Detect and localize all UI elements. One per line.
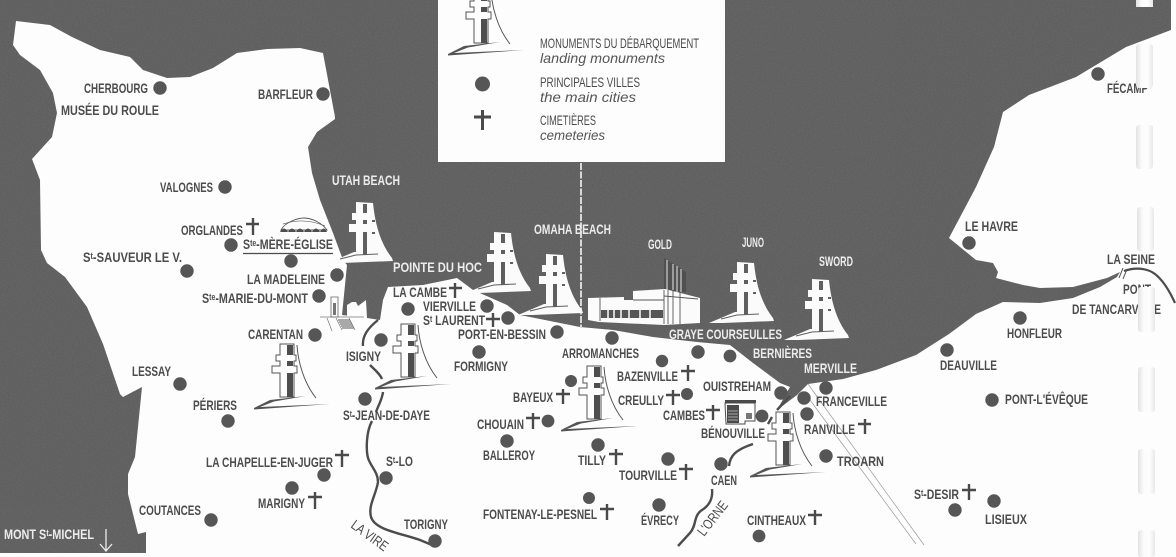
city: Ranville: RANVILLE [804, 421, 855, 437]
monument: Pointe du Hoc [466, 232, 531, 293]
city: Le Havre: LE HAVRE [965, 218, 1018, 234]
city: Carentan: CARENTAN [248, 326, 303, 342]
city: Saint-Lô: -LO [395, 453, 413, 469]
label: Mont Saint-Michel: t [46, 528, 49, 538]
label: Utah Beach: UTAH BEACH [332, 172, 400, 188]
city: Fontenay-le-Pesnel: FONTENAY-LE-PESNEL [483, 506, 597, 522]
city: Évrecy [641, 498, 679, 528]
binding holes strip [1136, 0, 1155, 557]
city: Saint-Lô [379, 453, 413, 485]
city: Saint-Désir [914, 484, 976, 517]
cemetery: Orglandes: ORGLANDES [181, 222, 243, 238]
city: Fécamp: FÉCAMP [1107, 80, 1148, 96]
city: Vierville: VIERVILLE [423, 298, 476, 314]
city: Caen: CAEN [711, 472, 737, 488]
city: Saint-Jean-de-Daye: -JEAN-DE-DAYE [352, 407, 430, 423]
city: Sainte-Marie-du-Mont: S [202, 290, 211, 306]
city: La Madeleine: LA MADELEINE [247, 271, 325, 287]
icon: Gold beach building [588, 258, 700, 325]
city: Balleroy: BALLEROY [483, 447, 535, 463]
monument: Isigny [375, 324, 451, 390]
city: Caen [711, 457, 737, 488]
city: Saint-Jean-de-Daye [343, 392, 430, 423]
city: Saint-Jean-de-Daye: t [350, 409, 352, 419]
city: Cintheaux [747, 510, 822, 542]
city: Le Havre [962, 218, 1018, 250]
city: Marigny: MARIGNY [258, 495, 305, 511]
cemetery: Cambes: CAMBES [663, 407, 705, 423]
city: Formigny: FORMIGNY [454, 358, 508, 374]
city: Creully [618, 388, 693, 408]
city: Troarn [819, 449, 884, 469]
city: Saint-Laurent: t [430, 314, 432, 324]
city: Saint-Laurent [423, 311, 515, 328]
city: Saint-Sauveur le V.: S [83, 249, 92, 265]
river: La Vire [363, 320, 432, 545]
city: Lessay: LESSAY [132, 363, 171, 379]
city: Bayeux [513, 375, 577, 405]
city: Ouistreham: OUISTREHAM [703, 378, 771, 394]
city: Coutances [139, 502, 218, 527]
monument: Carentan [254, 344, 330, 410]
city: Saint-Sauveur le V. [83, 249, 194, 278]
city: Lisieux: LISIEUX [985, 511, 1028, 527]
city: Tilly [578, 438, 623, 468]
city: Lessay [132, 363, 187, 391]
label: Mont Saint-Michel: MONT S [4, 526, 58, 542]
city: Formigny [454, 345, 508, 374]
city: Saint-Sauveur le V.: -SAUVEUR LE V. [93, 249, 182, 265]
underline: Sainte-Mère-Église [243, 252, 333, 254]
city: Torigny: TORIGNY [404, 516, 448, 532]
label: Gold: GOLD [648, 236, 672, 252]
river: L'Orne [678, 396, 790, 546]
city: Sainte-Mère-Église: te [250, 238, 256, 248]
arrow: towards Mont Saint-Michel [100, 529, 112, 551]
city: Isigny [346, 333, 388, 364]
city: Saint-Lô: t [393, 455, 395, 465]
legend text: cimetières: CIMETIÈRES [540, 112, 596, 128]
city: Isigny: ISIGNY [346, 348, 381, 364]
icon: Utah Beach landing stairs [320, 297, 367, 331]
city: Sainte-Mère-Église: S [243, 236, 252, 252]
city: Lisieux [985, 494, 1028, 527]
legend text: landing monuments: landing monuments [540, 50, 665, 66]
city: Barfleur: BARFLEUR [258, 86, 313, 102]
city: Saint-Laurent: LAURENT [432, 312, 485, 328]
city: Évrecy: ÉVRECY [641, 512, 679, 528]
city: Courseulles [724, 350, 736, 362]
city: Bazenville: BAZENVILLE [617, 368, 678, 384]
city: Périers: PÉRIERS [193, 397, 237, 413]
city: Fécamp [1091, 67, 1148, 96]
city: Saint-Désir: S [914, 486, 923, 502]
dot near Sainte-Mère-Église [284, 254, 298, 268]
city: Graye [691, 345, 705, 359]
icon: Sainte-Mère-Église dome [280, 218, 327, 232]
label: Pont: PONT [1123, 281, 1151, 297]
city: Ranville [800, 407, 871, 437]
city: La Cambe [393, 283, 462, 316]
city: Coutances: COUTANCES [139, 502, 201, 518]
city: Honfleur: HONFLEUR [1007, 325, 1062, 341]
city: Sainte-Marie-du-Mont: te [209, 292, 215, 302]
legend text: villes: PRINCIPALES VILLES [540, 74, 640, 90]
label: Graye Courseulles: GRAYE COURSEULLES [669, 326, 782, 342]
city: Cintheaux: CINTHEAUX [747, 512, 806, 528]
city: La Chapelle-en-Juger: LA CHAPELLE-EN-JUGER [206, 454, 333, 470]
monument: Sword [784, 279, 849, 340]
icon: Bénouville Pegasus bridge building [725, 400, 756, 424]
legend cross [474, 110, 491, 130]
city: Fontenay-le-Pesnel [483, 492, 614, 522]
city: Pont-l'Évêque: PONT-L'ÉVÊQUE [1005, 390, 1088, 407]
city: Franceville [797, 391, 887, 409]
legend panel [438, 0, 725, 162]
city: Honfleur [1007, 311, 1062, 341]
city: Deauville [940, 343, 997, 373]
city: Sainte-Mère-Église [224, 236, 333, 252]
city: Bayeux: BAYEUX [513, 389, 553, 405]
label: Musée du Roule: MUSÉE DU ROULE [61, 102, 159, 118]
legend text: main cities: the main cities [540, 89, 636, 105]
city: Cherbourg: CHERBOURG [84, 80, 148, 96]
city: Ouistreham [703, 378, 788, 400]
city: Tourville [619, 452, 693, 483]
label: Juno: JUNO [742, 234, 764, 250]
city: Arromanches: ARROMANCHES [562, 345, 639, 361]
city: Saint-Jean-de-Daye: S [343, 407, 352, 423]
legend text: cemeteries: cemeteries [540, 127, 605, 143]
dotted meridian line [580, 163, 582, 328]
city: Périers [193, 397, 237, 428]
label: La Seine: LA SEINE [1107, 251, 1155, 267]
monument: Juno [709, 262, 774, 323]
monument: Ranville [750, 412, 826, 478]
city: La Chapelle-en-Juger [206, 450, 349, 482]
label: Bernières: BERNIÈRES [753, 345, 812, 361]
label: Sword: SWORD [819, 253, 853, 269]
legend monument icon [448, 0, 524, 56]
city: Valognes: VALOGNES [160, 179, 213, 195]
city: Bazenville [617, 355, 695, 384]
city: Saint-Sauveur le V.: t [91, 251, 93, 261]
label: Merville: MERVILLE [804, 360, 857, 376]
city: Franceville: FRANCEVILLE [816, 393, 887, 409]
label: L'Orne: L'ORNE [694, 497, 731, 539]
city: Merville [819, 381, 833, 395]
city: Tourville: TOURVILLE [619, 467, 677, 483]
city: Sainte-Marie-du-Mont: -MARIE-DU-MONT [215, 290, 308, 306]
city: Bénouville: BÉNOUVILLE [701, 425, 765, 441]
monument: Utah Beach [328, 202, 393, 263]
city: Saint-Désir: -DESIR [923, 486, 959, 502]
city: Bénouville [701, 410, 768, 441]
city: Saint-Désir: t [921, 488, 923, 498]
legend text: monuments: MONUMENTS DU DÉBARQUEMENT [540, 35, 699, 51]
city: Saint-Lô: S [386, 453, 395, 469]
city: Balleroy [483, 434, 535, 463]
monument: Omaha Beach [518, 254, 583, 315]
city: Tilly: TILLY [578, 452, 606, 468]
city: La Cambe: LA CAMBE [393, 284, 447, 300]
city: Port-en-Bessin: PORT-EN-BESSIN [458, 326, 546, 342]
city: Pont-l'Évêque [985, 390, 1088, 407]
city: Arromanches [562, 331, 639, 361]
city: Troarn: TROARN [837, 453, 884, 469]
city: Creully: CREULLY [618, 392, 664, 408]
legend city dot [475, 76, 490, 92]
railway lines [808, 384, 924, 545]
label: Mont Saint-Michel: -MICHEL [49, 526, 94, 542]
label: Omaha Beach: OMAHA BEACH [534, 221, 611, 237]
city: Chouain: CHOUAIN [477, 416, 524, 432]
city: Saint-Laurent: S [423, 312, 432, 328]
label: Pointe du Hoc: POINTE DU HOC [393, 259, 482, 275]
bridge marks [1119, 268, 1127, 279]
city: Torigny [404, 516, 448, 548]
city: Marigny [258, 481, 322, 511]
river: La Seine [1124, 269, 1175, 303]
monument: Bayeux [561, 366, 637, 432]
city: Deauville: DEAUVILLE [940, 357, 997, 373]
city: Sainte-Mère-Église: -MÈRE-ÉGLISE [256, 236, 333, 252]
